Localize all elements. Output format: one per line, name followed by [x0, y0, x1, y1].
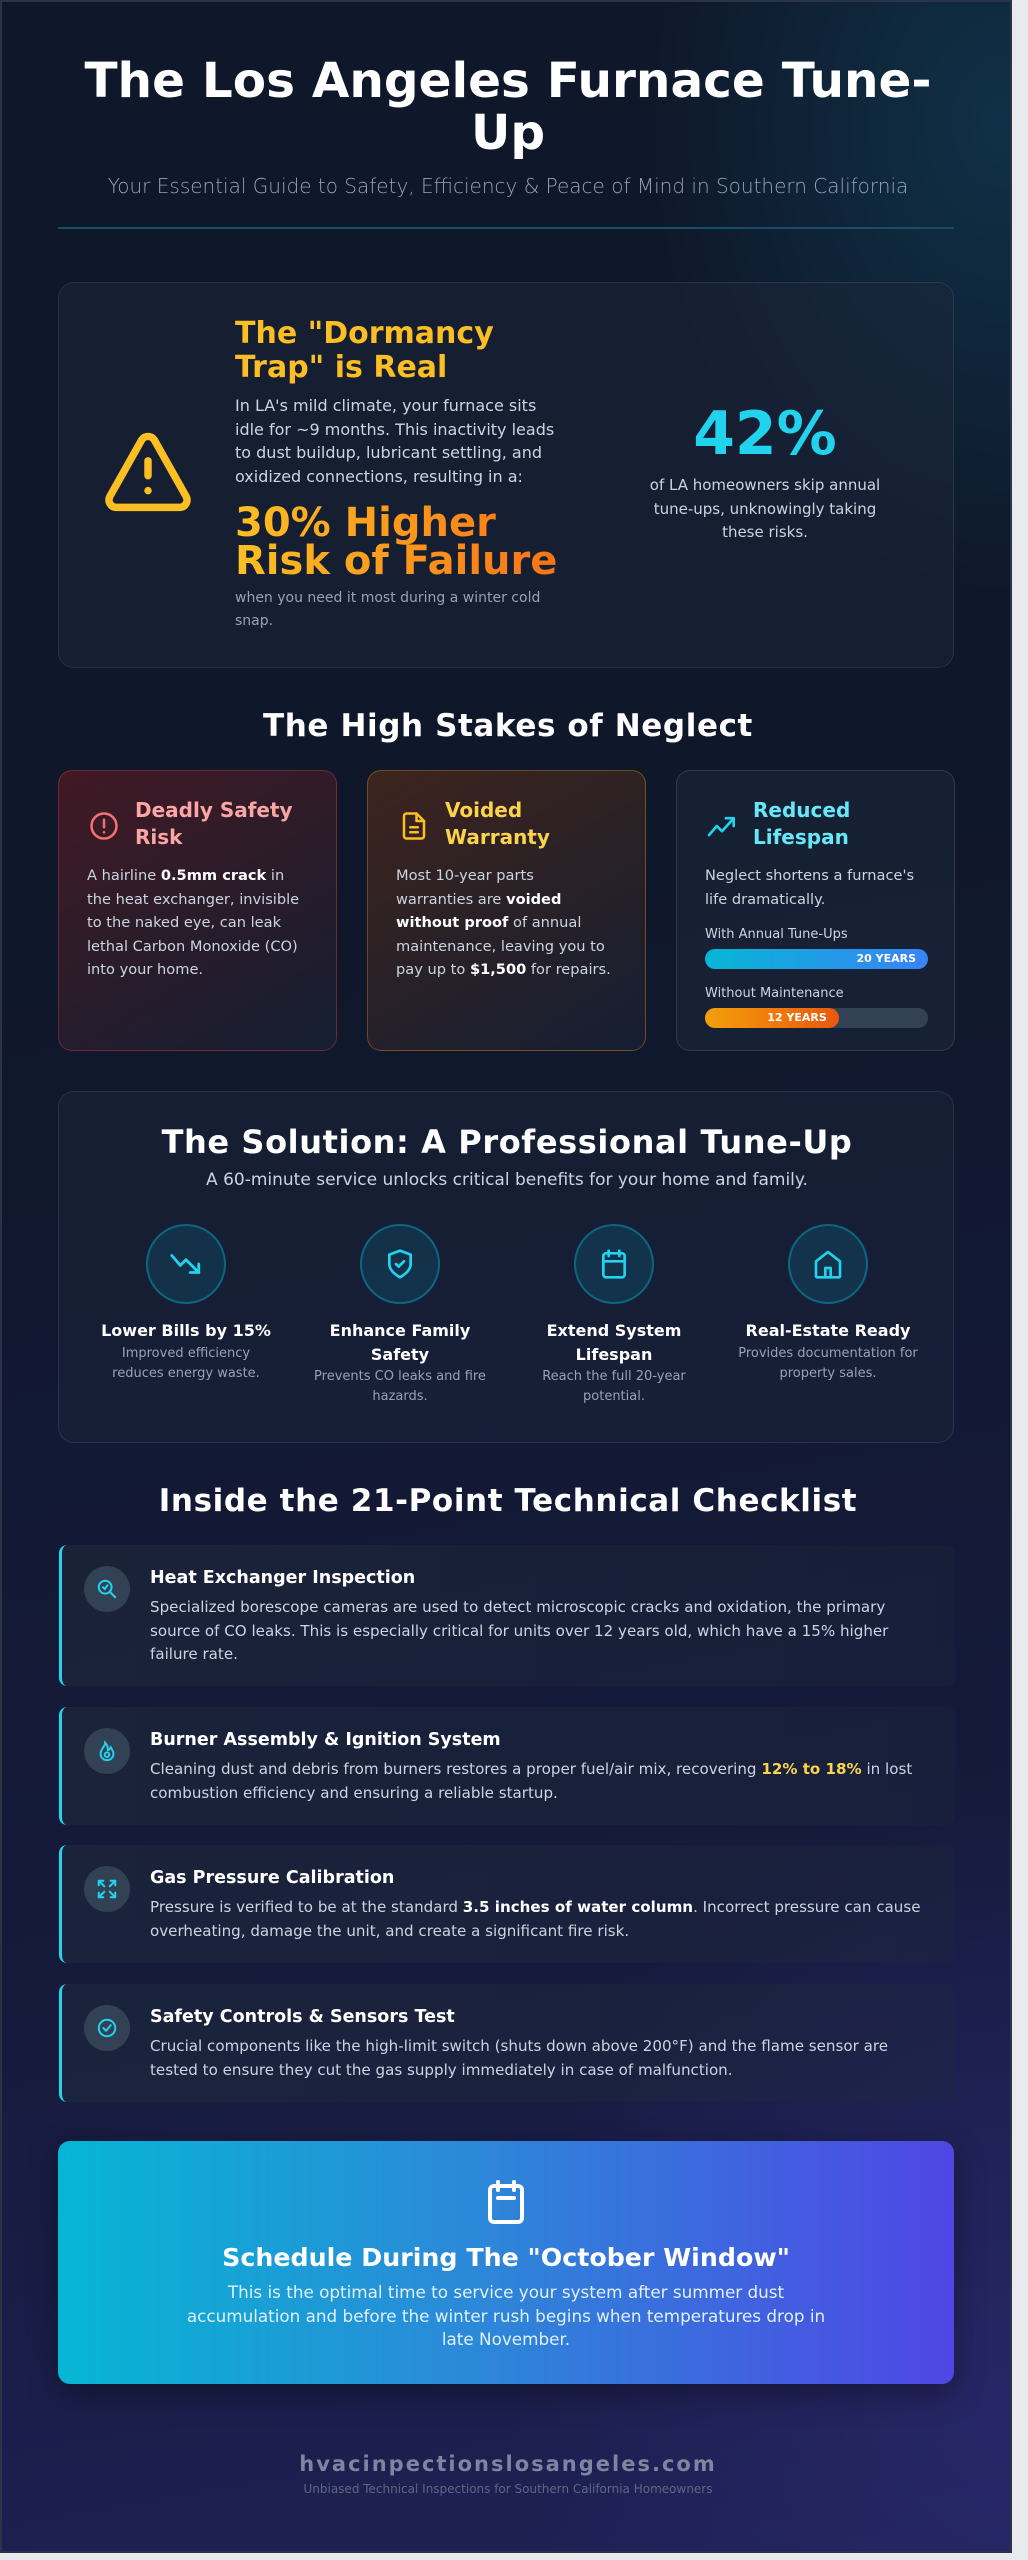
checklist item: heat exchanger: failure rate.	[150, 1645, 238, 1663]
text block: dormancy explanation: idle for ~9 months. This inactivity leads	[235, 420, 554, 439]
icon: alert circle	[90, 812, 118, 840]
card text: to the naked eye, can leak	[87, 914, 281, 931]
card heading	[445, 798, 550, 849]
card text: A hairline 0.5mm crack in	[87, 867, 284, 884]
benefit: lower bills: Lower Bills by 15%	[101, 1321, 271, 1340]
card text: Most 10-year parts	[396, 867, 534, 884]
heading: high stakes: The High Stakes of Neglect	[263, 708, 753, 744]
benefit: lower bills	[101, 1224, 271, 1380]
footer: hvacinpectionslosangeles.com	[299, 2452, 717, 2476]
bar chart: lifespan: With Annual Tune-Ups	[705, 927, 848, 942]
icon: arrows	[84, 1866, 130, 1912]
checklist item: gas pressure: overheating, damage the unit, and create a significant fire risk.	[150, 1922, 629, 1940]
checklist item: safety controls: tested to ensure they cut the gas supply immediately in case of malfunction.	[150, 2060, 733, 2078]
stat: 30% higher risk	[235, 504, 557, 580]
card heading: Reduced	[753, 798, 850, 822]
benefit: real estate: Real-Estate Ready	[746, 1321, 910, 1340]
benefit: lower bills: reduces energy waste.	[112, 1366, 260, 1380]
title	[84, 53, 932, 161]
card text: without proof of annual	[396, 914, 581, 931]
bar chart: lifespan	[705, 927, 928, 1028]
icon: warning triangle	[105, 432, 191, 512]
card text	[87, 867, 299, 978]
checklist item: safety controls: Safety Controls & Sensors Test	[150, 2007, 455, 2027]
card heading	[753, 798, 850, 849]
text block: dormancy explanation: oxidized connections, resulting in a:	[235, 467, 523, 486]
benefit: real estate: Provides documentation for	[738, 1346, 918, 1360]
footer	[299, 2452, 717, 2496]
icon: search	[84, 1566, 130, 1612]
subtitle: solution: A 60-minute service unlocks critical benefits for your home and family.	[206, 1170, 808, 1190]
stat: 30% higher risk: 30% Higher	[235, 500, 496, 546]
card heading: Lifespan	[753, 825, 849, 849]
caption: 42% homeowners: tune-ups, unknowingly taking	[654, 500, 876, 518]
card text: pay up to $1,500 for repairs.	[396, 961, 611, 978]
checklist item: safety controls: Crucial components like the high-limit switch (shuts down above 200°F) and the flame sensor are	[150, 2037, 888, 2055]
bar chart: lifespan: 12 YEARS	[767, 1011, 827, 1024]
icon: document	[402, 812, 426, 840]
card text	[705, 867, 914, 908]
title: Up	[471, 105, 545, 161]
icon: shield	[360, 1224, 440, 1304]
benefit: family safety: Safety	[371, 1344, 429, 1364]
icon: check circle	[84, 2005, 130, 2051]
text block: dormancy explanation: In LA's mild climate, your furnace sits	[235, 396, 536, 415]
checklist item: gas pressure: Gas Pressure Calibration	[150, 1868, 394, 1888]
footer: Unbiased Technical Inspections for Southern California Homeowners	[303, 2482, 712, 2496]
caption: 42% homeowners: these risks.	[722, 523, 808, 541]
text block: dormancy explanation: to dust buildup, lubricant settling, and	[235, 443, 542, 462]
icon: house	[788, 1224, 868, 1304]
card text: lethal Carbon Monoxide (CO)	[87, 938, 298, 954]
benefit: family safety: hazards.	[372, 1389, 428, 1404]
checklist item: gas pressure	[59, 1845, 955, 1963]
callout text	[187, 2282, 825, 2349]
callout text: This is the optimal time to service your system after summer dust	[228, 2282, 784, 2302]
panel: dormancy trap	[58, 282, 954, 668]
icon: flame	[84, 1728, 130, 1774]
card text: maintenance, leaving you to	[396, 938, 605, 954]
benefit: family safety	[314, 1224, 486, 1404]
checklist item: heat exchanger: Heat Exchanger Inspection	[150, 1568, 415, 1588]
stat: 30% higher risk: Risk of Failure	[235, 538, 557, 584]
benefit: lifespan: potential.	[583, 1389, 645, 1404]
heading: dormancy trap: The "Dormancy	[235, 316, 494, 351]
card text: into your home.	[87, 961, 203, 978]
title: The Los Angeles Furnace Tune-	[84, 53, 932, 109]
benefit: lifespan: Extend System	[547, 1321, 681, 1340]
callout text: late November.	[442, 2329, 570, 2349]
benefit: real estate: property sales.	[779, 1366, 877, 1380]
checklist item: heat exchanger: Specialized borescope cameras are used to detect microscopic cracks and oxidation, the primary	[150, 1598, 885, 1616]
icon: trending down	[146, 1224, 226, 1304]
checklist item: burner: combustion efficiency and ensuring a reliable startup.	[150, 1784, 558, 1802]
bar chart: lifespan: 20 YEARS	[856, 952, 916, 965]
card heading: Deadly Safety	[135, 798, 293, 822]
checklist item: gas pressure: Pressure is verified to be at the standard 3.5 inches of water column. Incorrect pressure can cause	[150, 1898, 920, 1916]
card text: life dramatically.	[705, 890, 825, 908]
card heading: Voided	[445, 798, 522, 822]
checklist item: burner	[59, 1707, 955, 1825]
stat: 42%: 42%	[693, 399, 837, 469]
benefit: lifespan: Reach the full 20-year	[542, 1369, 686, 1384]
text block: winter cold snap	[235, 590, 540, 629]
checklist item: heat exchanger: source of CO leaks. This is especially critical for units over 12 years old, which have a 15% higher	[150, 1622, 888, 1640]
callout: october window	[58, 2141, 954, 2384]
icon: trending up	[708, 816, 736, 836]
checklist item: burner: Cleaning dust and debris from burners restores a proper fuel/air mix, recovering 12% to 18% in lost	[150, 1760, 912, 1778]
icon: calendar	[574, 1224, 654, 1304]
card text: warranties are voided	[396, 890, 561, 908]
card heading: Warranty	[445, 825, 550, 849]
checklist item: heat exchanger	[59, 1545, 955, 1686]
heading: checklist: Inside the 21-Point Technical Checklist	[159, 1483, 857, 1519]
subtitle: Your Essential Guide to Safety, Efficiency & Peace of Mind in Southern California	[108, 174, 908, 198]
benefit: lifespan: Lifespan	[576, 1344, 652, 1364]
benefit: family safety: Enhance Family	[330, 1321, 470, 1340]
benefit: lifespan	[542, 1224, 686, 1404]
benefit: real estate	[738, 1224, 918, 1380]
card text	[396, 867, 611, 978]
text block: dormancy explanation	[235, 396, 554, 486]
benefit: lower bills: Improved efficiency	[122, 1346, 250, 1360]
caption: 42% homeowners: of LA homeowners skip annual	[650, 476, 880, 494]
caption: 42% homeowners	[650, 476, 880, 541]
card text: Neglect shortens a furnace's	[705, 867, 914, 884]
card heading: Risk	[135, 825, 182, 849]
heading: dormancy trap	[235, 316, 494, 385]
card heading	[135, 798, 293, 849]
checklist item: burner: Burner Assembly & Ignition System	[150, 1730, 501, 1750]
panel: solution	[58, 1091, 954, 1443]
bar chart: lifespan: Without Maintenance	[705, 986, 844, 1001]
text block: winter cold snap: when you need it most during a winter cold	[235, 590, 540, 606]
icon: calendar	[488, 2180, 524, 2224]
callout heading: Schedule During The "October Window"	[222, 2243, 790, 2272]
panel: deadly safety risk	[58, 770, 337, 1051]
text block: winter cold snap: snap.	[235, 613, 273, 629]
heading: dormancy trap: Trap" is Real	[235, 350, 447, 385]
benefit: family safety: Prevents CO leaks and fire	[314, 1369, 486, 1384]
checklist item: safety controls	[59, 1984, 955, 2102]
panel: reduced lifespan	[676, 770, 955, 1051]
card text: the heat exchanger, invisible	[87, 890, 299, 908]
heading: solution: The Solution: A Professional Tune-Up	[162, 1123, 852, 1161]
callout text: accumulation and before the winter rush begins when temperatures drop in	[187, 2306, 825, 2326]
panel: voided warranty	[367, 770, 646, 1051]
